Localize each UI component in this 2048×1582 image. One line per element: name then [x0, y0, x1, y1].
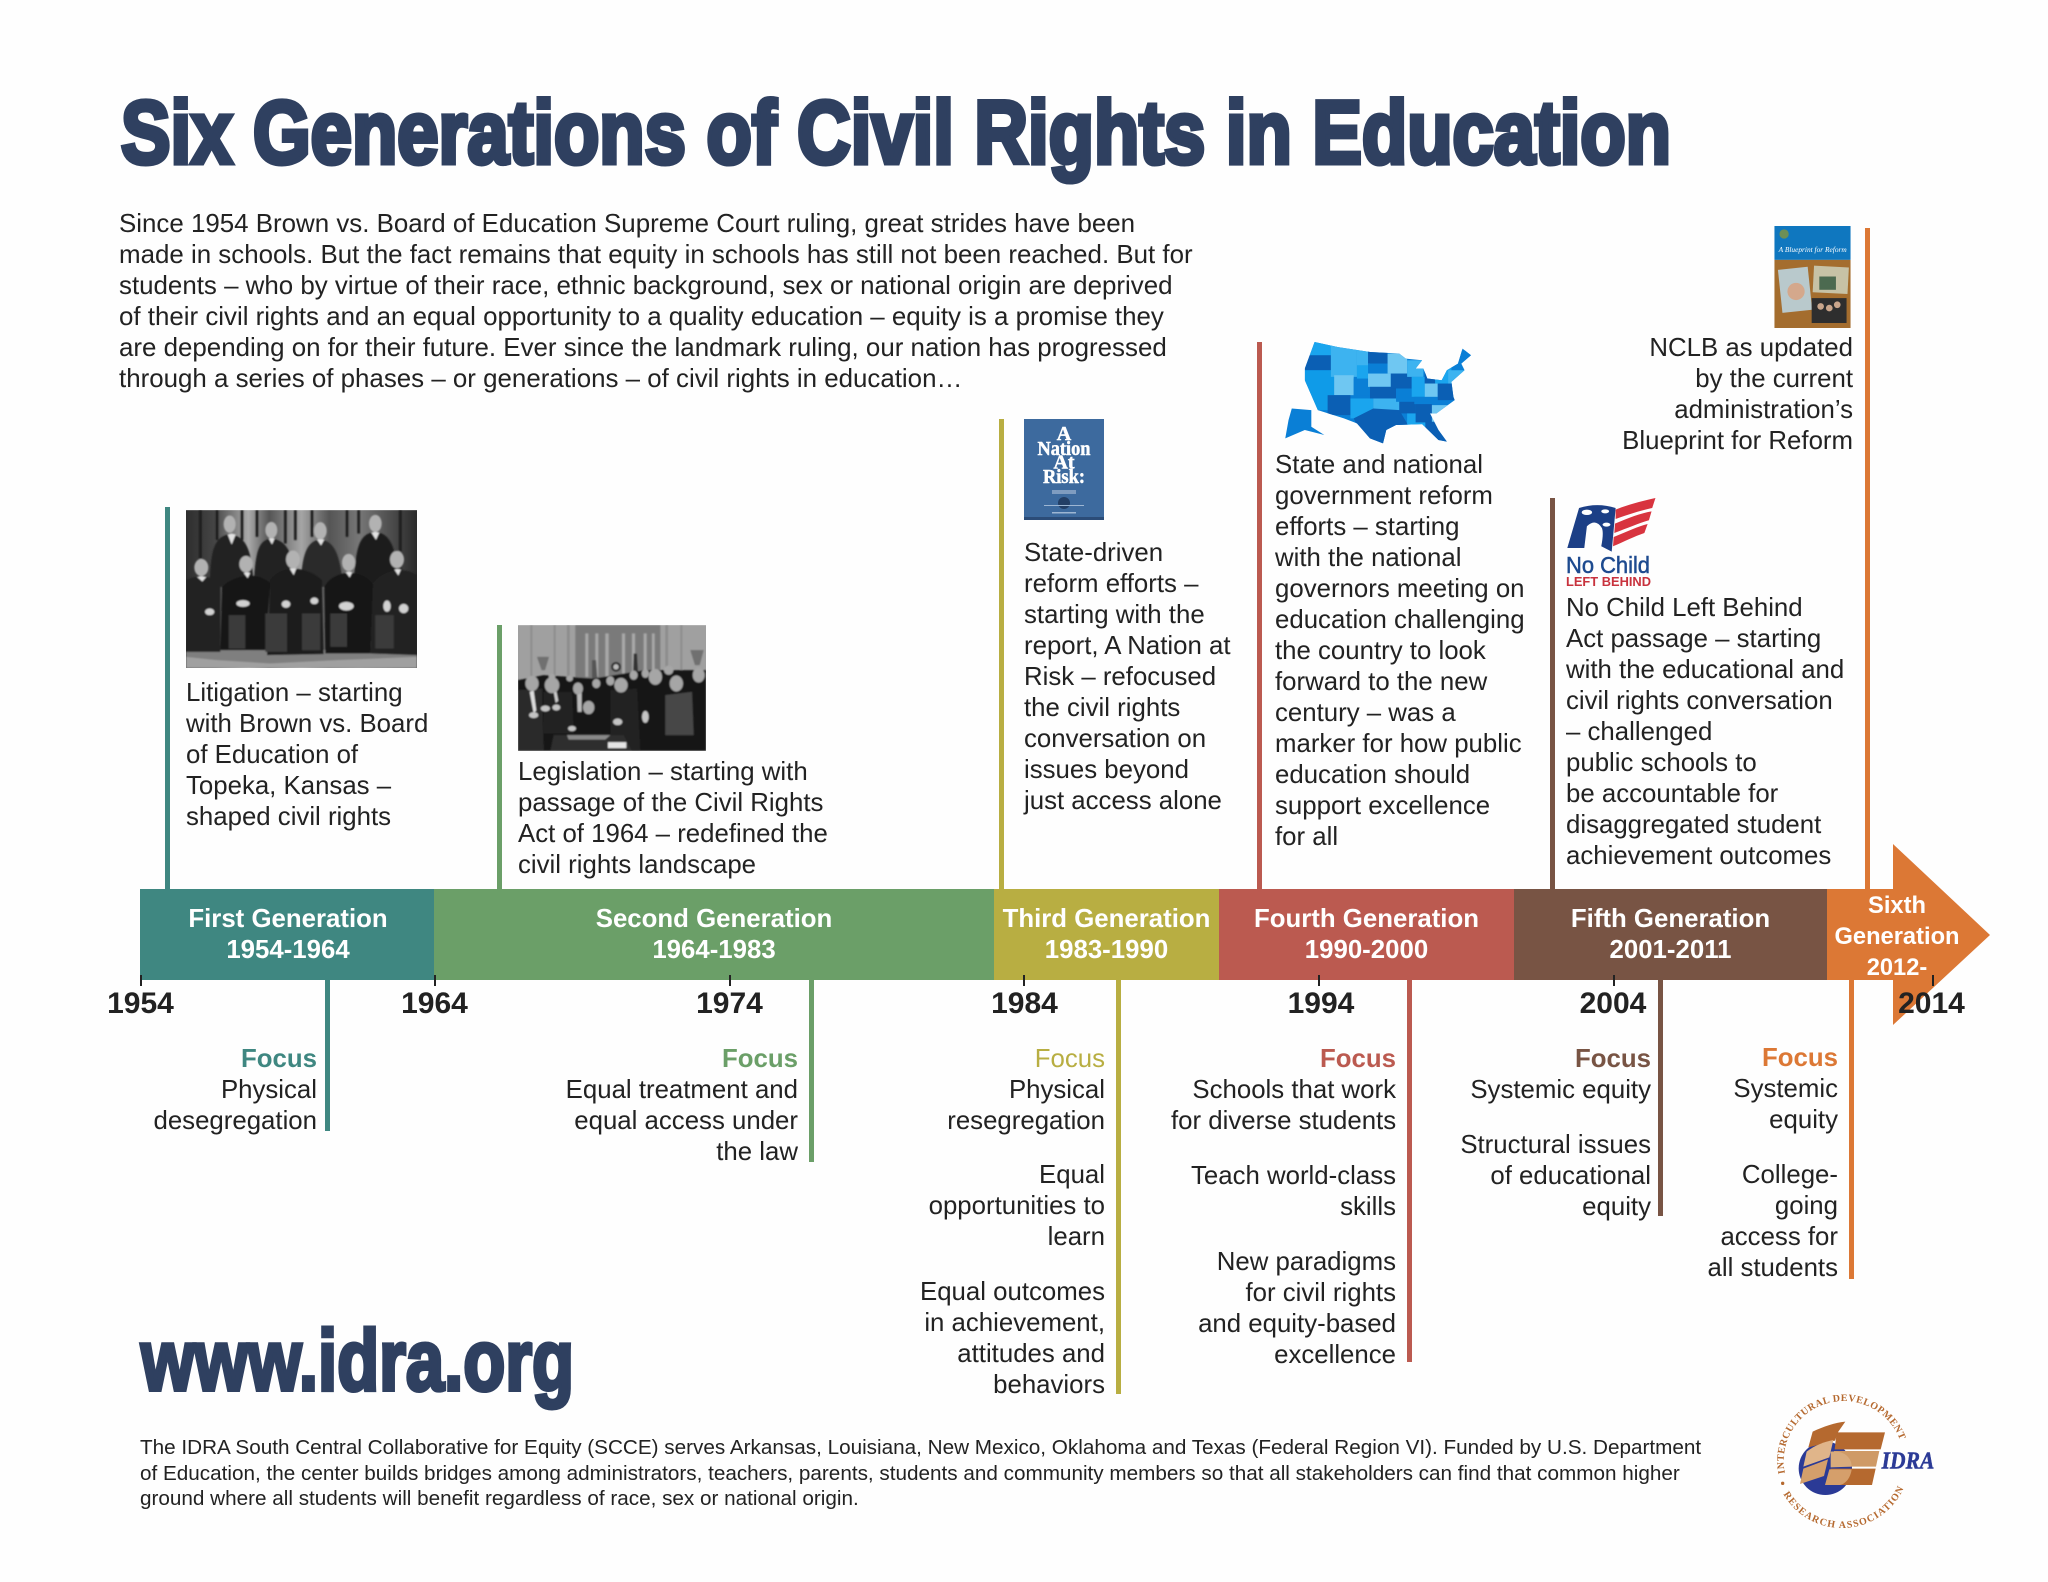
icon: A Nation At Risk report cover: At [1053, 452, 1075, 474]
focus: fifth generation: Focus [1575, 1044, 1651, 1072]
band: first generation [140, 889, 434, 980]
icon: A Nation At Risk report cover [1024, 419, 1104, 520]
intro text [119, 210, 1193, 392]
focus: first generation [153, 1044, 317, 1134]
text: state and national reform: efforts – starting [1275, 512, 1460, 540]
text: No Child Left Behind: Act passage – starting [1566, 624, 1821, 652]
tick 1964 [434, 975, 436, 986]
intro text: are depending on for their future. Ever since the landmark ruling, our nation has progressed [119, 334, 1167, 362]
tick 1954 [140, 975, 142, 986]
band: first generation: 1954-1964 [226, 936, 350, 964]
focus: fourth generation: excellence [1274, 1340, 1396, 1368]
focus: third generation: learn [1048, 1222, 1105, 1250]
focus: fifth generation: Systemic equity [1470, 1076, 1651, 1104]
band: third generation: 1983-1990 [1045, 936, 1168, 964]
footer text: of Education, the center builds bridges among administrators, teachers, parents, students and community members so that all stakeholders can find that common higher [140, 1462, 1680, 1484]
marker line: second generation top [497, 625, 502, 889]
text: state and national reform: governors meeting on [1275, 574, 1525, 602]
focus: sixth generation: Systemic [1733, 1075, 1838, 1103]
text: litigation [186, 678, 428, 830]
focus: third generation: Equal [1039, 1160, 1105, 1188]
text: NCLB updated: NCLB as updated [1649, 334, 1853, 362]
focus: third generation: opportunities to [929, 1192, 1105, 1220]
text: state-driven reform: State-driven [1024, 538, 1163, 566]
focus: fourth generation: New paradigms [1217, 1248, 1396, 1276]
band label: sixth generation [1834, 893, 1960, 981]
band label: sixth generation: Generation [1834, 924, 1960, 950]
text: No Child Left Behind [1566, 594, 1844, 870]
focus: sixth generation: all students [1708, 1254, 1838, 1282]
focus: first generation: Focus [241, 1044, 317, 1072]
text: NCLB updated: by the current [1695, 364, 1853, 392]
text: legislation: Act of 1964 – redefined the [518, 820, 828, 848]
band: fifth generation [1514, 889, 1827, 980]
marker line: fifth generation bottom [1658, 980, 1663, 1216]
footer text: ground where all students will benefit regardless of race, sex or national origin. [140, 1487, 859, 1510]
year 1964: 1964 [401, 987, 468, 1020]
icon: Blueprint for Reform cover: A Blueprint for Reform [1778, 246, 1847, 254]
time axis [107, 975, 1965, 1020]
focus: sixth generation: going [1775, 1192, 1838, 1220]
logo: IDRA: INTERCULTURAL DEVELOPMENT [1777, 1394, 1906, 1474]
marker line: fourth generation top [1257, 342, 1262, 889]
band: second generation [434, 889, 994, 980]
focus: fifth generation: of educational [1490, 1162, 1651, 1190]
text: litigation: shaped civil rights [186, 802, 391, 830]
focus: first generation: Physical [221, 1076, 317, 1104]
band: second generation: 1964-1983 [652, 936, 776, 964]
band: second generation: Second Generation [596, 904, 832, 932]
focus: fourth generation: Focus [1320, 1044, 1396, 1072]
year 1994: 1994 [1288, 987, 1354, 1020]
marker line: fourth generation bottom [1407, 980, 1412, 1362]
focus: fourth generation: for diverse students [1171, 1106, 1396, 1134]
panel: third generation [920, 419, 1231, 1398]
tick 1994 [1318, 975, 1320, 986]
marker line: second generation bottom [809, 980, 814, 1162]
photo: Civil Rights Act signing [518, 625, 706, 751]
text: NCLB updated: administration’s [1674, 396, 1853, 424]
focus: sixth generation: Focus [1762, 1044, 1838, 1072]
focus: fourth generation: skills [1340, 1192, 1396, 1220]
text: state and national reform: century – was a [1275, 698, 1456, 726]
band: fourth generation: 1990-2000 [1305, 936, 1428, 964]
band: sixth generation arrow [1827, 844, 1990, 1025]
footer text: The IDRA South Central Collaborative for Equity (SCCE) serves Arkansas, Louisiana, New Mexico, Oklahoma and Texas (Federal Region VI). Funded by U.S. Department [140, 1436, 1701, 1459]
band: fifth generation: Fifth Generation [1571, 904, 1770, 932]
text: state-driven reform: starting with the [1024, 600, 1205, 628]
panel: first generation [140, 507, 434, 1134]
text: state and national reform: government reform [1275, 482, 1493, 510]
focus: sixth generation: access for [1720, 1223, 1838, 1251]
marker line: first generation bottom [325, 980, 330, 1131]
text: state-driven reform: conversation on [1024, 724, 1206, 752]
marker line: third generation top [999, 419, 1004, 889]
text: state and national reform: forward to the new [1275, 668, 1487, 696]
focus: fourth generation [1171, 1044, 1396, 1368]
text: legislation: passage of the Civil Rights [518, 788, 823, 816]
text: state and national reform: the country to look [1275, 636, 1486, 664]
text: litigation: with Brown vs. Board [186, 710, 428, 738]
photo: Supreme Court justices [186, 510, 417, 668]
focus: third generation: Focus [1035, 1044, 1105, 1072]
marker line: third generation bottom [1116, 980, 1121, 1394]
icon: No Child Left Behind logo [1566, 498, 1656, 589]
icon: A Nation At Risk report cover: A [1057, 423, 1072, 445]
text: state and national reform [1275, 450, 1525, 850]
focus: third generation: Equal outcomes [920, 1278, 1105, 1306]
text: state-driven reform: Risk – refocused [1024, 662, 1216, 690]
marker line: sixth generation bottom [1849, 980, 1854, 1279]
focus: third generation: Physical [1009, 1076, 1105, 1104]
text: state and national reform: State and national [1275, 450, 1483, 478]
band: third generation: Third Generation [1003, 904, 1210, 932]
focus: fourth generation: Teach world-class [1191, 1162, 1396, 1190]
logo: IDRA: RESEARCH ASSOCIATION [1783, 1486, 1904, 1528]
focus: third generation: resegregation [947, 1106, 1105, 1134]
focus: sixth generation: equity [1769, 1106, 1838, 1134]
focus: fifth generation [1460, 1044, 1651, 1220]
text: state-driven reform: report, A Nation at [1024, 632, 1231, 660]
focus: second generation: Focus [722, 1044, 798, 1072]
band: fourth generation: Fourth Generation [1254, 904, 1479, 932]
intro text: Since 1954 Brown vs. Board of Education Supreme Court ruling, great strides have been [119, 210, 1135, 238]
intro text: of their civil rights and an equal opportunity to a quality education – equity is a promise they [119, 302, 1164, 330]
marker line: sixth generation top [1865, 228, 1870, 889]
band label: sixth generation: 2012- [1867, 955, 1927, 981]
focus: fourth generation: for civil rights [1245, 1278, 1396, 1306]
text: No Child Left Behind: civil rights conversation [1566, 686, 1833, 714]
focus: fifth generation: equity [1582, 1192, 1651, 1220]
text: legislation: civil rights landscape [518, 850, 756, 878]
panel: fourth generation [1171, 342, 1525, 1368]
text: No Child Left Behind: with the educational and [1566, 656, 1844, 684]
footer text [140, 1436, 1701, 1510]
text: state and national reform: marker for how public [1275, 730, 1522, 758]
tick 2004 [1613, 975, 1615, 986]
focus: first generation: desegregation [153, 1106, 317, 1134]
text: state and national reform: support excellence [1275, 792, 1490, 820]
band: fourth generation [1219, 889, 1514, 980]
logo: IDRA [1777, 1394, 1934, 1528]
text: No Child Left Behind: No Child Left Behind [1566, 594, 1803, 622]
text: state and national reform: for all [1275, 822, 1338, 850]
focus: second generation [566, 1044, 798, 1166]
text: state and national reform: education should [1275, 760, 1470, 788]
text: litigation: of Education of [186, 740, 358, 768]
year 1984: 1984 [991, 987, 1058, 1020]
text: state-driven reform: the civil rights [1024, 694, 1180, 722]
focus: third generation: in achievement, [924, 1308, 1105, 1336]
icon: Blueprint for Reform cover [1774, 226, 1851, 328]
text: No Child Left Behind: achievement outcomes [1566, 842, 1831, 870]
focus: fourth generation: and equity-based [1198, 1310, 1396, 1338]
focus: third generation: behaviors [993, 1370, 1105, 1398]
focus: second generation: equal access under [574, 1106, 798, 1134]
panel: sixth generation [1622, 226, 1990, 1282]
text: No Child Left Behind: disaggregated student [1566, 810, 1821, 838]
panel: second generation [434, 625, 994, 1166]
intro text: through a series of phases – or generations – of civil rights in education… [119, 364, 962, 392]
intro text: made in schools. But the fact remains that equity in schools has still not been reached. But for [119, 240, 1193, 268]
focus: second generation: the law [716, 1138, 798, 1166]
focus: sixth generation [1708, 1044, 1838, 1282]
band: fifth generation: 2001-2011 [1610, 936, 1731, 964]
band: first generation: First Generation [188, 904, 388, 932]
title: Six Generations of Civil Rights in Education [121, 82, 1671, 182]
year 2014: 2014 [1898, 987, 1965, 1020]
text: NCLB updated [1622, 334, 1853, 454]
panel: fifth generation [1460, 498, 1844, 1220]
website url: www.idra.org [140, 1313, 574, 1409]
marker line: fifth generation top [1550, 498, 1555, 889]
icon: No Child Left Behind logo: No Child [1566, 552, 1650, 578]
logo: IDRA: IDRA [1881, 1447, 1934, 1474]
icon: A Nation At Risk report cover: Nation [1038, 438, 1090, 460]
year 1974: 1974 [696, 987, 763, 1020]
text: NCLB updated: Blueprint for Reform [1622, 426, 1853, 454]
tick 1974 [729, 975, 731, 986]
text: litigation: Litigation – starting [186, 678, 403, 706]
marker line: first generation top [165, 507, 170, 889]
icon: No Child Left Behind logo: LEFT BEHIND [1566, 574, 1651, 589]
text: litigation: Topeka, Kansas – [186, 772, 391, 800]
year 2004: 2004 [1580, 987, 1646, 1020]
text: legislation [518, 758, 828, 878]
text: state-driven reform: just access alone [1024, 786, 1222, 814]
focus: sixth generation: College- [1742, 1161, 1838, 1189]
year 1954: 1954 [107, 987, 174, 1020]
focus: third generation [920, 1044, 1105, 1398]
tick 2014 [1932, 975, 1934, 986]
band: third generation [994, 889, 1219, 980]
text: state-driven reform: issues beyond [1024, 756, 1189, 784]
icon: US state map [1285, 342, 1471, 444]
tick 1984 [1023, 975, 1025, 986]
text: No Child Left Behind: public schools to [1566, 748, 1757, 776]
band label: sixth generation: Sixth [1868, 893, 1926, 919]
text: state and national reform: with the national [1275, 544, 1461, 572]
text: state and national reform: education challenging [1275, 606, 1525, 634]
focus: fifth generation: Structural issues [1460, 1130, 1651, 1158]
text: No Child Left Behind: be accountable for [1566, 780, 1778, 808]
focus: fourth generation: Schools that work [1192, 1076, 1396, 1104]
intro text: students – who by virtue of their race, ethnic background, sex or national origin are deprived [119, 272, 1172, 300]
text: state-driven reform [1023, 538, 1231, 814]
text: No Child Left Behind: – challenged [1566, 718, 1712, 746]
text: legislation: Legislation – starting with [518, 758, 808, 786]
icon: A Nation At Risk report cover: Risk: [1043, 466, 1085, 488]
focus: second generation: Equal treatment and [566, 1076, 798, 1104]
text: state-driven reform: reform efforts – [1024, 570, 1198, 598]
focus: third generation: attitudes and [957, 1340, 1105, 1368]
